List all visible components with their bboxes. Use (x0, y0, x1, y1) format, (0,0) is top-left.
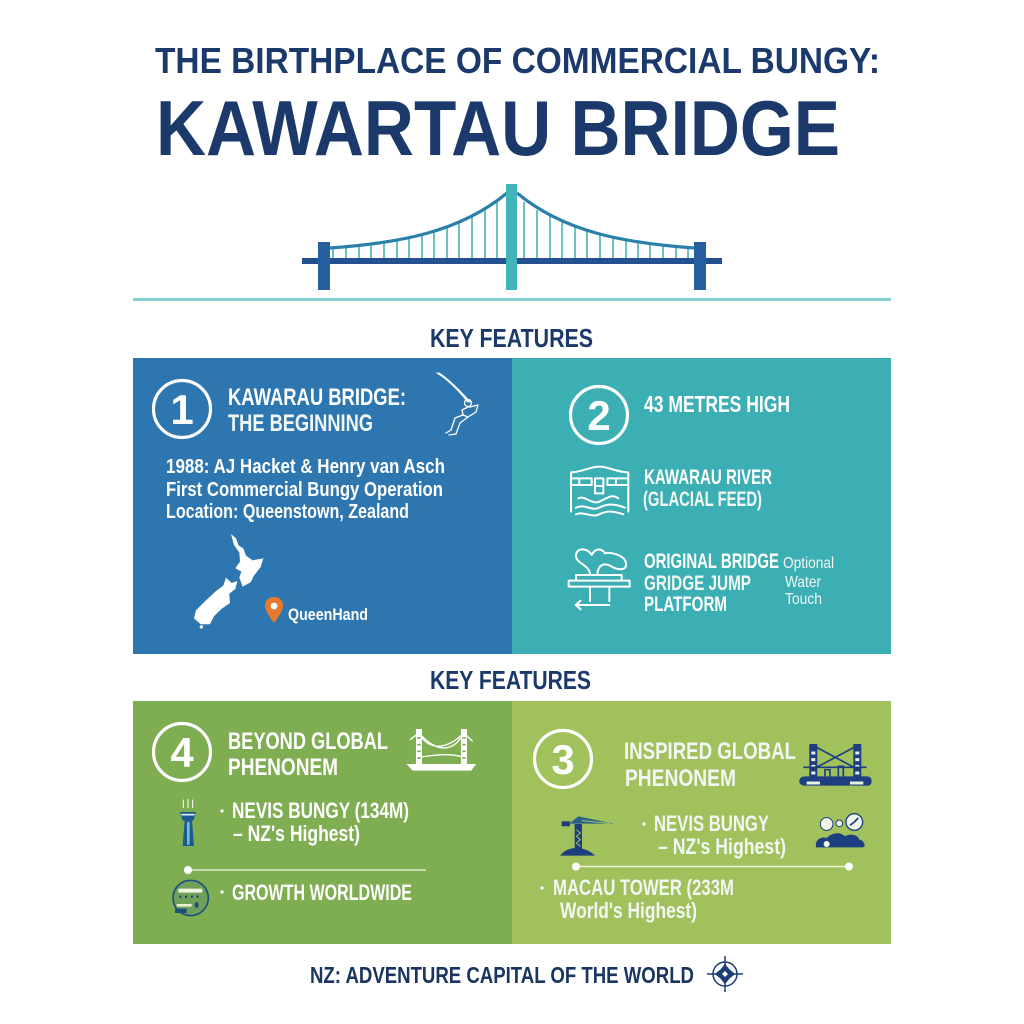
heading: key features (second): KEY FEATURES (430, 665, 591, 695)
number badge 3: 3 (551, 736, 575, 783)
platform label: GRIDGE JUMP (644, 572, 751, 595)
Nevis bullet text: – NZ's Highest) (233, 821, 360, 846)
panel: 43 metres high (512, 358, 891, 654)
icon: location pin (265, 597, 283, 623)
Nevis bullet text: NEVIS BUNGY (134M) (232, 798, 409, 823)
title (155, 40, 880, 172)
growth bullet text (220, 880, 412, 905)
Nevis bullet text (220, 798, 409, 846)
river label: (GLACIAL FEED) (643, 488, 762, 511)
panel heading: THE BEGINNING (228, 410, 373, 437)
panel heading: KAWARAU BRIDGE: (228, 384, 406, 411)
illustration: suspension bridge (302, 184, 722, 290)
Nevis bullet text (642, 811, 786, 859)
number badge 1 (154, 380, 210, 438)
number badge 4 (154, 724, 210, 780)
icon: river under bridge (571, 467, 628, 516)
optional water touch note: Water (785, 574, 822, 591)
height label: 43 METRES HIGH (644, 391, 790, 417)
body text: 1988: AJ Hacket & Henry van Asch (166, 455, 445, 478)
map label: QueenHand (288, 605, 368, 624)
title: KAWARTAU BRIDGE (156, 84, 840, 172)
optional water touch note (783, 555, 834, 608)
icon: compass (707, 956, 743, 992)
icon: bungy jumper on rope (437, 373, 478, 435)
platform label: ORIGINAL BRIDGE (644, 550, 779, 573)
icon: white bridge (407, 729, 476, 771)
icon: crane tower (560, 816, 613, 856)
icon: navy bridge (799, 744, 872, 786)
icon: cloud and ideas (816, 814, 865, 847)
body text: First Commercial Bungy Operation (166, 478, 443, 501)
map: New Zealand (194, 534, 263, 629)
icon: globe of activities (173, 880, 208, 916)
number badge 4: 4 (170, 729, 194, 776)
Macau bullet text: World's Highest) (560, 898, 697, 923)
icon: Nevis tower (180, 799, 196, 846)
timeline divider (572, 862, 853, 870)
heading: key features: KEY FEATURES (430, 323, 593, 353)
panel heading (228, 728, 388, 781)
number badge 2: 2 (587, 392, 611, 439)
panel heading (624, 738, 796, 792)
panel: inspired global phenomenon (512, 701, 891, 944)
number badge 2 (570, 386, 628, 444)
panel: beyond global phenomenon (133, 701, 512, 944)
number badge 1: 1 (170, 386, 194, 433)
platform label: PLATFORM (644, 593, 727, 616)
river label (643, 466, 772, 511)
growth bullet text: GROWTH WORLDWIDE (232, 880, 412, 905)
optional water touch note: Optional (783, 555, 834, 572)
footer tagline: NZ: ADVENTURE CAPITAL OF THE WORLD (310, 962, 694, 988)
panel heading: PHENONEM (625, 765, 736, 792)
panel heading: BEYOND GLOBAL (228, 728, 388, 755)
panel: Kawarau Bridge, the beginning (133, 358, 512, 654)
river label: KAWARAU RIVER (644, 466, 772, 489)
panel heading (228, 384, 406, 437)
optional water touch note: Touch (785, 591, 822, 608)
Macau bullet text (540, 875, 734, 923)
number badge 3 (534, 730, 592, 788)
Macau bullet text: MACAU TOWER (233M (553, 875, 734, 900)
Nevis bullet text: NEVIS BUNGY (654, 811, 769, 836)
Nevis bullet text: – NZ's Highest) (658, 834, 786, 859)
body text (166, 455, 445, 523)
timeline divider (184, 866, 426, 874)
title: THE BIRTHPLACE OF COMMERCIAL BUNGY: (155, 40, 880, 81)
body text: Location: Queenstown, Zealand (166, 500, 409, 523)
icon: jump platform with splash (569, 549, 630, 609)
panel heading: PHENONEM (228, 754, 338, 781)
panel heading: INSPIRED GLOBAL (624, 738, 796, 765)
platform label (644, 550, 779, 616)
